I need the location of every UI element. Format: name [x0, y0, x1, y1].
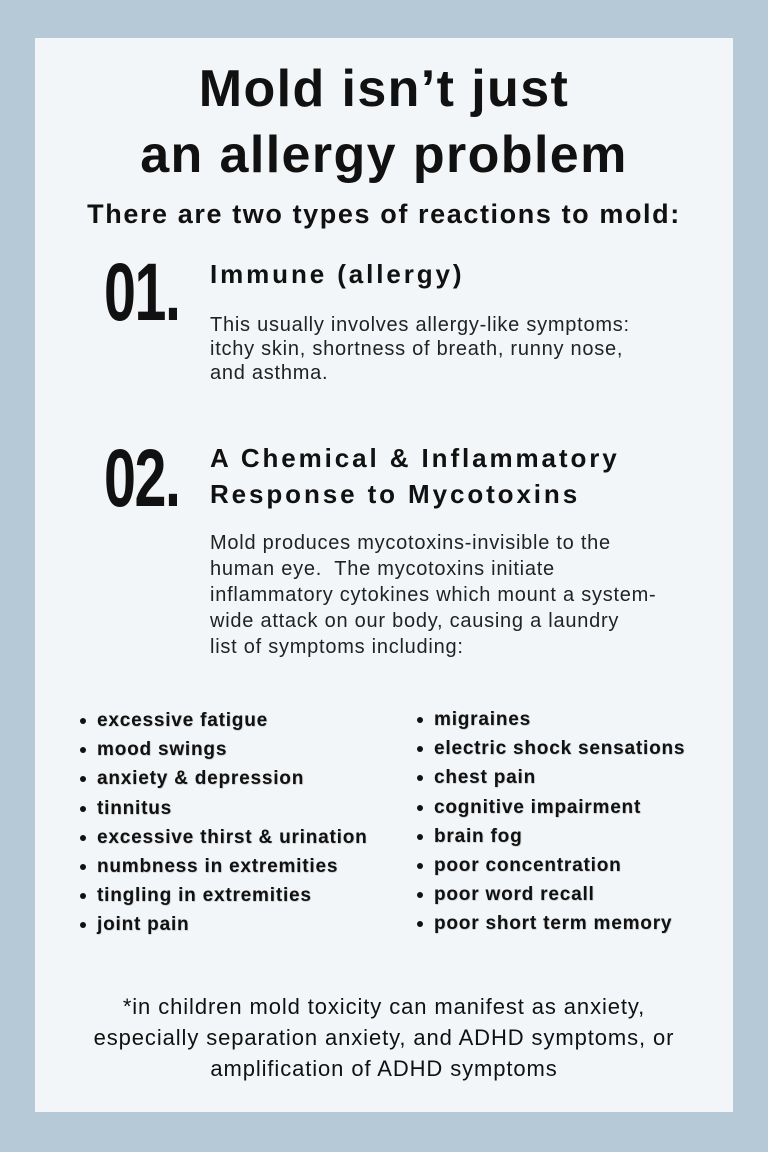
list: symptoms left: mood swings [97, 739, 227, 760]
list: symptoms left: anxiety & depression [97, 768, 304, 789]
text: immune description: This usually involves allergy-like symptoms: [210, 314, 630, 336]
list: symptoms right [417, 709, 685, 934]
text: immune description [210, 314, 630, 384]
list: symptoms left: tingling in extremities [97, 885, 312, 906]
text: immune description: and asthma. [210, 362, 328, 384]
heading: immune: Immune (allergy) [210, 259, 464, 289]
list: symptoms right: chest pain [434, 767, 536, 788]
list: symptoms right: poor concentration [434, 855, 622, 876]
subtitle: There are two types of reactions to mold: [87, 199, 681, 229]
list: symptoms left: tinnitus [97, 798, 172, 819]
list: symptoms right: migraines [434, 709, 531, 730]
number 01: 01. [104, 247, 180, 338]
list: symptoms right: poor word recall [434, 884, 595, 905]
title: an allergy problem [140, 126, 628, 184]
footnote: *in children mold toxicity can manifest as anxiety, [123, 994, 645, 1019]
heading: chemical response [210, 443, 620, 509]
list: symptoms right: brain fog [434, 826, 522, 847]
text: mycotoxins description [210, 532, 656, 658]
list: symptoms left: joint pain [97, 914, 189, 935]
title: Mold isn’t just [199, 60, 569, 118]
heading: chemical response: A Chemical & Inflammatory [210, 443, 620, 473]
list: symptoms left: numbness in extremities [97, 856, 338, 877]
footnote: amplification of ADHD symptoms [210, 1056, 558, 1081]
title [140, 60, 628, 184]
text: mycotoxins description: human eye. The mycotoxins initiate [210, 558, 555, 580]
list: symptoms right: poor short term memory [434, 913, 672, 934]
footnote: especially separation anxiety, and ADHD symptoms, or [94, 1025, 674, 1050]
list: symptoms left: excessive fatigue [97, 710, 268, 731]
text: mycotoxins description: Mold produces mycotoxins-invisible to the [210, 532, 611, 554]
text: immune description: itchy skin, shortness of breath, runny nose, [210, 338, 623, 360]
text: mycotoxins description: wide attack on our body, causing a laundry [210, 610, 619, 632]
list: symptoms right: cognitive impairment [434, 797, 641, 818]
list: symptoms left: excessive thirst & urination [97, 827, 368, 848]
list: symptoms right: electric shock sensations [434, 738, 685, 759]
heading: chemical response: Response to Mycotoxins [210, 479, 580, 509]
text: mycotoxins description: inflammatory cytokines which mount a system- [210, 584, 656, 606]
text: mycotoxins description: list of symptoms including: [210, 636, 464, 658]
footnote [94, 994, 674, 1081]
list: symptoms left [80, 710, 368, 935]
number 02: 02. [104, 433, 180, 524]
